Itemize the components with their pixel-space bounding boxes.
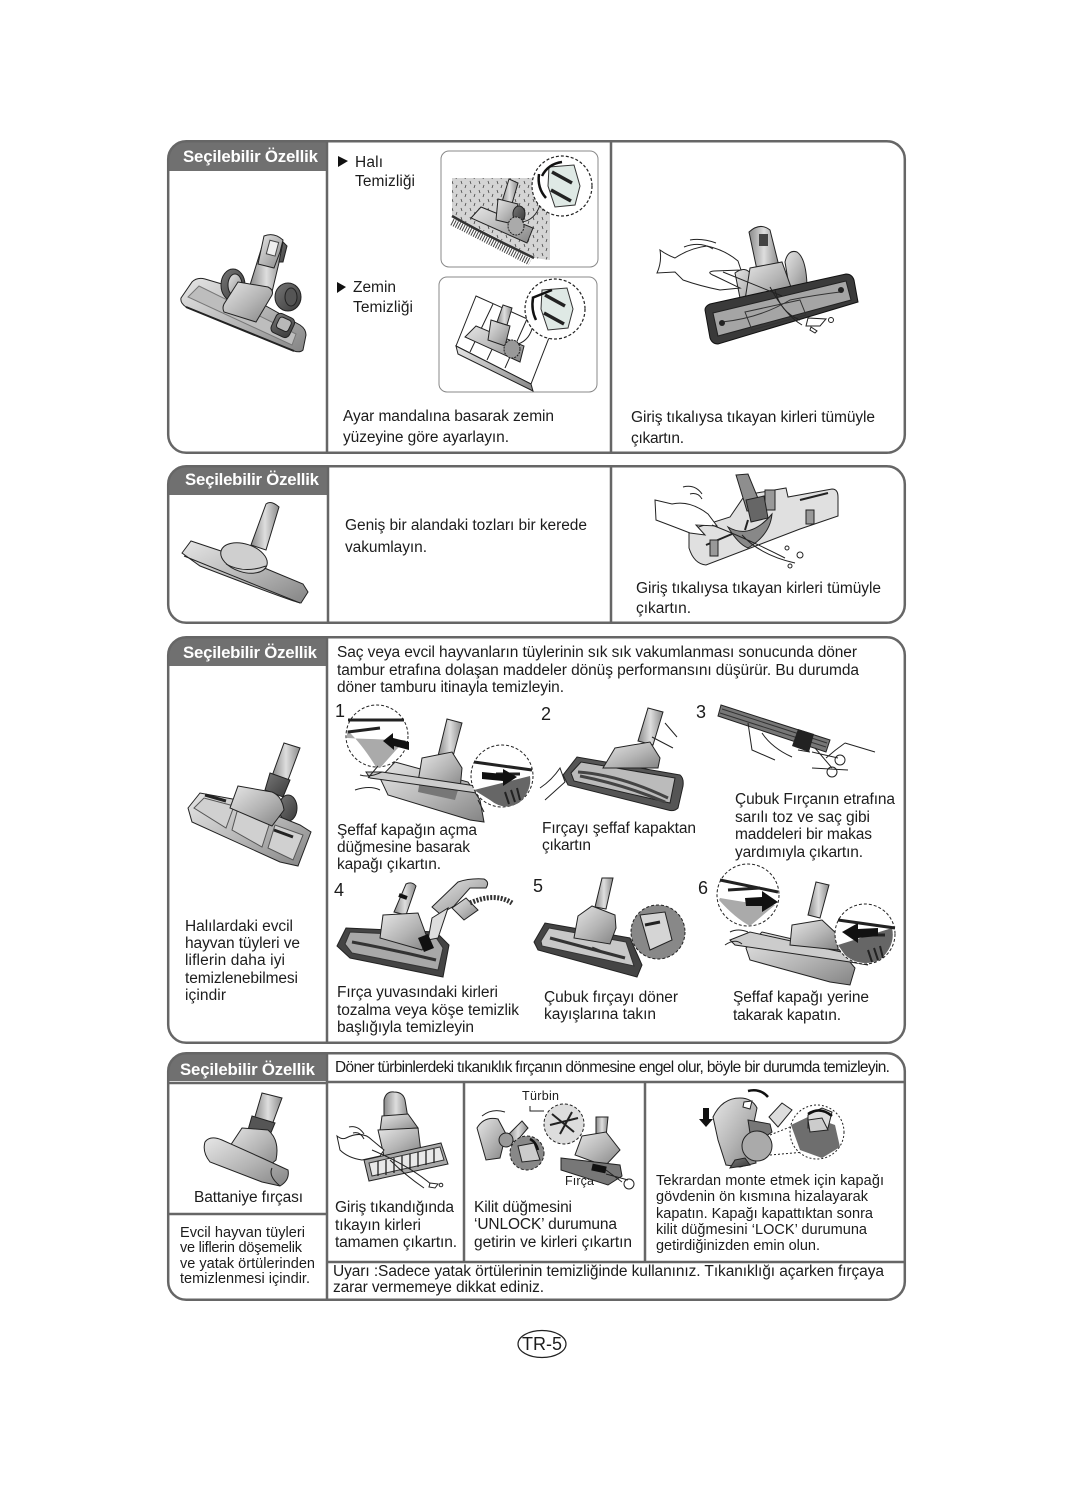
text: Zemin Temizliği: Zemin xyxy=(353,279,396,296)
icon: turbo nozzle xyxy=(188,743,311,866)
text: blanket brush purpose: Evcil hayvan tüyleri xyxy=(180,1225,305,1241)
text: unlock xyxy=(474,1199,632,1251)
panel 4 header: Seçilebilir Özellik xyxy=(180,1060,316,1079)
text: refit: kilit düğmesini ‘LOCK’ durumuna xyxy=(656,1222,868,1238)
panel: wide floor nozzle xyxy=(168,466,905,623)
text: refit: kapatın. Kapağı kapattıktan sonra xyxy=(656,1206,874,1222)
text: blanket brush purpose: ve yatak örtülerinden xyxy=(180,1256,315,1272)
text: turbo nozzle purpose: içindir xyxy=(185,987,226,1004)
text: step 4: başlığıyla temizleyin xyxy=(337,1019,474,1036)
panel: adjustable floor nozzle xyxy=(168,141,905,453)
text: remove debris xyxy=(636,580,881,617)
text: step 5 xyxy=(544,989,678,1023)
step 5 xyxy=(533,876,685,977)
text: step 3: maddeleri bir makas xyxy=(735,826,872,843)
text: blanket brush purpose: ve liflerin döşemelik xyxy=(180,1240,303,1256)
text: lever instruction xyxy=(343,408,554,446)
text: warning: zarar vermemeye dikkat ediniz. xyxy=(333,1279,544,1296)
text: Halı Temizliği xyxy=(338,154,415,190)
text: intro paragraph: döner tamburu itinayla temizleyin. xyxy=(337,679,564,696)
text: remove debris: çıkartın. xyxy=(631,430,684,447)
panel 3 header: Seçilebilir Özellik xyxy=(183,643,318,662)
illustration: clearing blocked brush xyxy=(337,1092,448,1188)
text: turbo nozzle purpose xyxy=(185,918,300,1004)
text: step 6 xyxy=(733,989,869,1024)
icon: blanket brush xyxy=(204,1093,288,1186)
illustration: refit cover xyxy=(699,1090,844,1168)
step 3 xyxy=(696,702,875,777)
text: Zemin Temizliği: Temizliği xyxy=(353,299,413,316)
page number xyxy=(518,1330,566,1358)
text: step 1: kapağı çıkartın. xyxy=(337,856,441,873)
panel 4 header xyxy=(168,1053,327,1081)
text: step 6: takarak kapatın. xyxy=(733,1007,841,1024)
text: step 3: Çubuk Fırçanın etrafına xyxy=(735,791,895,808)
text: refit: getirdiğinizden emin olun. xyxy=(656,1238,820,1254)
text: lever instruction: yüzeyine göre ayarlayın. xyxy=(343,429,509,446)
text: remove debris: çıkartın. xyxy=(636,600,691,617)
text: warning xyxy=(333,1263,884,1296)
icon: wide nozzle xyxy=(182,503,308,603)
step 5: 5 xyxy=(533,876,543,896)
text: step 1: düğmesine basarak xyxy=(337,839,470,856)
step 3: 3 xyxy=(696,702,706,722)
text: step 2: Fırçayı şeffaf kapaktan xyxy=(542,820,696,837)
illustration: clearing blocked floor nozzle xyxy=(657,226,858,344)
text: clog removal xyxy=(335,1199,457,1251)
illustration: turbine and brush xyxy=(477,1089,634,1189)
text: wide nozzle description: Geniş bir alandaki tozları bir kerede xyxy=(345,517,587,534)
inset: carpet mode xyxy=(441,151,598,267)
text: step 1 xyxy=(337,822,477,873)
illustration: clearing wide nozzle xyxy=(655,474,838,568)
text: step 2: çıkartın xyxy=(542,837,591,854)
text: remove debris xyxy=(631,409,875,447)
text: Halı Temizliği: Temizliği xyxy=(355,173,415,190)
text: refit: gövdenin ön kısmına hizalayarak xyxy=(656,1189,869,1205)
step 1 xyxy=(335,701,533,822)
icon: floor nozzle xyxy=(181,235,306,352)
text: unlock: ‘UNLOCK’ durumuna xyxy=(474,1216,617,1233)
step 1: 1 xyxy=(335,701,345,721)
text: refit xyxy=(656,1173,884,1254)
text: step 2 xyxy=(542,820,696,854)
text: unlock: Kilit düğmesini xyxy=(474,1199,572,1216)
illustration: turbine and brush: Türbin xyxy=(522,1089,559,1103)
text: refit: Tekrardan monte etmek için kapağı xyxy=(656,1173,884,1189)
step 6 xyxy=(698,864,895,985)
step 2 xyxy=(540,704,683,811)
panel: turbo brush cleaning steps xyxy=(168,637,905,1043)
panel 3 header xyxy=(168,637,327,666)
text: blanket brush purpose xyxy=(180,1225,315,1287)
text: turbo nozzle purpose: liflerin daha iyi xyxy=(185,952,285,969)
text: intro paragraph: tambur etrafına dolaşan maddeler dönüş performansını düşürür. Bu durumda xyxy=(337,662,859,679)
page number: TR-5 xyxy=(522,1334,562,1354)
text: Halı Temizliği: Halı xyxy=(355,154,383,171)
text: lever instruction: Ayar mandalına basarak zemin xyxy=(343,408,554,425)
text: header description: Döner türbinlerdeki tıkanıklık fırçanın dönmesine engel olur, böyle bir durumda temizleyin. xyxy=(335,1059,890,1076)
text: unlock: getirin ve kirleri çıkartın xyxy=(474,1234,632,1251)
panel 2 header: Seçilebilir Özellik xyxy=(185,470,320,489)
text: turbo nozzle purpose: hayvan tüyleri ve xyxy=(185,935,300,952)
text: step 1: Şeffaf kapağın açma xyxy=(337,822,477,839)
text: step 4: Fırça yuvasındaki kirleri xyxy=(337,984,498,1001)
text: remove debris: Giriş tıkalıysa tıkayan kirleri tümüyle xyxy=(631,409,875,426)
text: step 5: Çubuk fırçayı döner xyxy=(544,989,678,1006)
text: clog removal: tamamen çıkartın. xyxy=(335,1234,457,1251)
text: turbo nozzle purpose: temizlenebilmesi xyxy=(185,970,298,987)
text: step 5: kayışlarına takın xyxy=(544,1006,656,1023)
text: blanket brush purpose: temizlenmesi içindir. xyxy=(180,1271,310,1287)
text: remove debris: Giriş tıkalıysa tıkayan kirleri tümüyle xyxy=(636,580,881,597)
text: step 3: sarılı toz ve saç gibi xyxy=(735,809,870,826)
text: wide nozzle description xyxy=(345,517,587,556)
text: wide nozzle description: vakumlayın. xyxy=(345,539,427,556)
text: step 3 xyxy=(735,791,895,861)
illustration: turbine and brush: Fırça xyxy=(565,1174,594,1188)
text: step 4 xyxy=(337,984,519,1036)
text: step 3: yardımıyla çıkartın. xyxy=(735,844,863,861)
inset: hard floor mode xyxy=(439,277,597,392)
step 4 xyxy=(334,879,512,977)
step 4: 4 xyxy=(334,880,344,900)
panel 1 header xyxy=(168,141,327,171)
text: turbo nozzle purpose: Halılardaki evcil xyxy=(185,918,293,935)
panel 2 header xyxy=(168,466,328,495)
text: clog removal: tıkayın kirleri xyxy=(335,1217,421,1234)
step 6: 6 xyxy=(698,878,708,898)
text: clog removal: Giriş tıkandığında xyxy=(335,1199,454,1216)
text: Zemin Temizliği xyxy=(337,279,413,316)
text: step 4: tozalma veya köşe temizlik xyxy=(337,1002,519,1019)
text: step 6: Şeffaf kapağı yerine xyxy=(733,989,869,1006)
text: intro paragraph xyxy=(337,644,859,696)
text: warning: Uyarı :Sadece yatak örtülerinin temizliğinde kullanınız. Tıkanıklığı açarken fırçaya xyxy=(333,1263,884,1280)
panel 1 header: Seçilebilir Özellik xyxy=(183,147,319,166)
step 2: 2 xyxy=(541,704,551,724)
panel: blanket brush xyxy=(168,1053,905,1300)
text: blanket brush label: Battaniye fırçası xyxy=(194,1189,303,1206)
text: intro paragraph: Saç veya evcil hayvanların tüylerinin sık sık vakumlanması sonucunda döner xyxy=(337,644,857,661)
